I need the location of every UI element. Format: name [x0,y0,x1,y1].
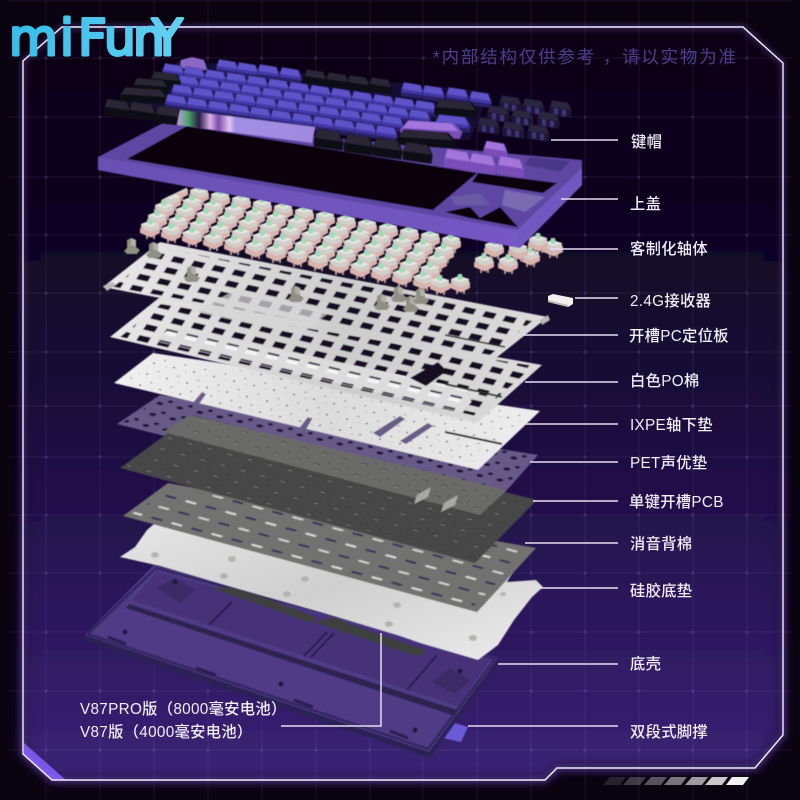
label: receiver: 2.4G接收器 [630,293,711,310]
layer: slotted PCB [120,415,537,563]
layer: bottom case [85,565,498,758]
icon: stabilizers [124,238,429,312]
label: silicone: 硅胶底垫 [630,583,692,600]
label: battery versions [80,700,287,741]
brand logo: miFunY [9,9,183,67]
bottom row and spacebar [104,98,433,164]
decorative stripes [603,777,749,785]
layer: custom switches [140,181,563,295]
function row [180,57,492,108]
label: battery versions: V87版（4000毫安电池） [80,723,253,741]
label: PO foam: 白色PO棉 [630,373,700,390]
layer: PET acoustic pad [117,395,538,490]
label: foam: 消音背棉 [630,535,692,553]
layer: white PO foam [110,297,542,423]
layer: top frame [98,123,582,248]
label: IXPE: IXPE轴下垫 [630,417,713,434]
icon: 2.4G receiver [548,294,573,307]
arrow keys [444,141,524,178]
label: battery versions: V87PRO版（8000毫安电池） [80,700,287,718]
label: foot: 双段式脚撑 [630,723,708,741]
layer: IXPE switch pad [114,353,540,470]
layer: silicone bottom pad [120,510,543,660]
layer: slotted PC plate [103,238,550,362]
callout lines [281,140,618,726]
label: plate: 开槽PC定位板 [629,327,729,345]
label: switches: 客制化轴体 [630,240,708,258]
keycap base shadow [110,60,490,140]
icon: two-stage foot [443,723,468,742]
label: bottom case: 底壳 [630,656,661,673]
navigation cluster [477,95,572,142]
label: PET: PET声优垫 [630,454,707,472]
label: keycaps: 键帽 [631,133,662,151]
label: PCB: 单键开槽PCB [629,493,724,511]
alpha rows [119,63,478,148]
layer: sound dampening foam [123,483,536,612]
layer: keycaps [104,57,572,178]
disclaimer note: *内部结构仅供参考 ，请以实物为准 [433,47,736,67]
label: top cover: 上盖 [630,196,661,213]
